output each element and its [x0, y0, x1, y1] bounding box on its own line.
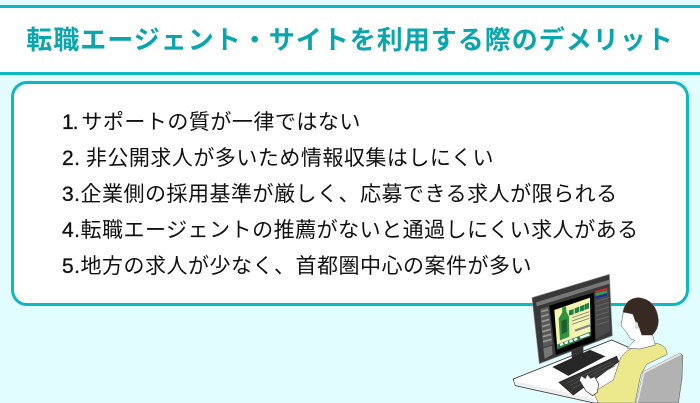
title: 転職エージェント・サイトを利用する際のデメリット [26, 25, 674, 55]
illustration: person working at a computer [512, 274, 683, 403]
desk [513, 340, 640, 403]
list item 4: 4.転職エージェントの推薦がないと通過しにくい求人がある [62, 219, 639, 242]
monitor stand [553, 345, 605, 376]
chair [636, 353, 683, 403]
panel: drawbacks list [11, 81, 689, 306]
person [579, 297, 667, 403]
list item 5: 5.地方の求人が少なく、首都圏中心の案件が多い [62, 255, 532, 278]
list item 2: 2. 非公開求人が多いため情報収集はしにくい [62, 147, 494, 170]
title band [0, 5, 700, 75]
monitor [532, 274, 612, 364]
list item 3: 3.企業側の採用基準が厳しく、応募できる求人が限られる [62, 183, 618, 206]
list item 1: 1. サポートの質が一律ではない [62, 111, 361, 134]
keyboard [559, 356, 619, 395]
